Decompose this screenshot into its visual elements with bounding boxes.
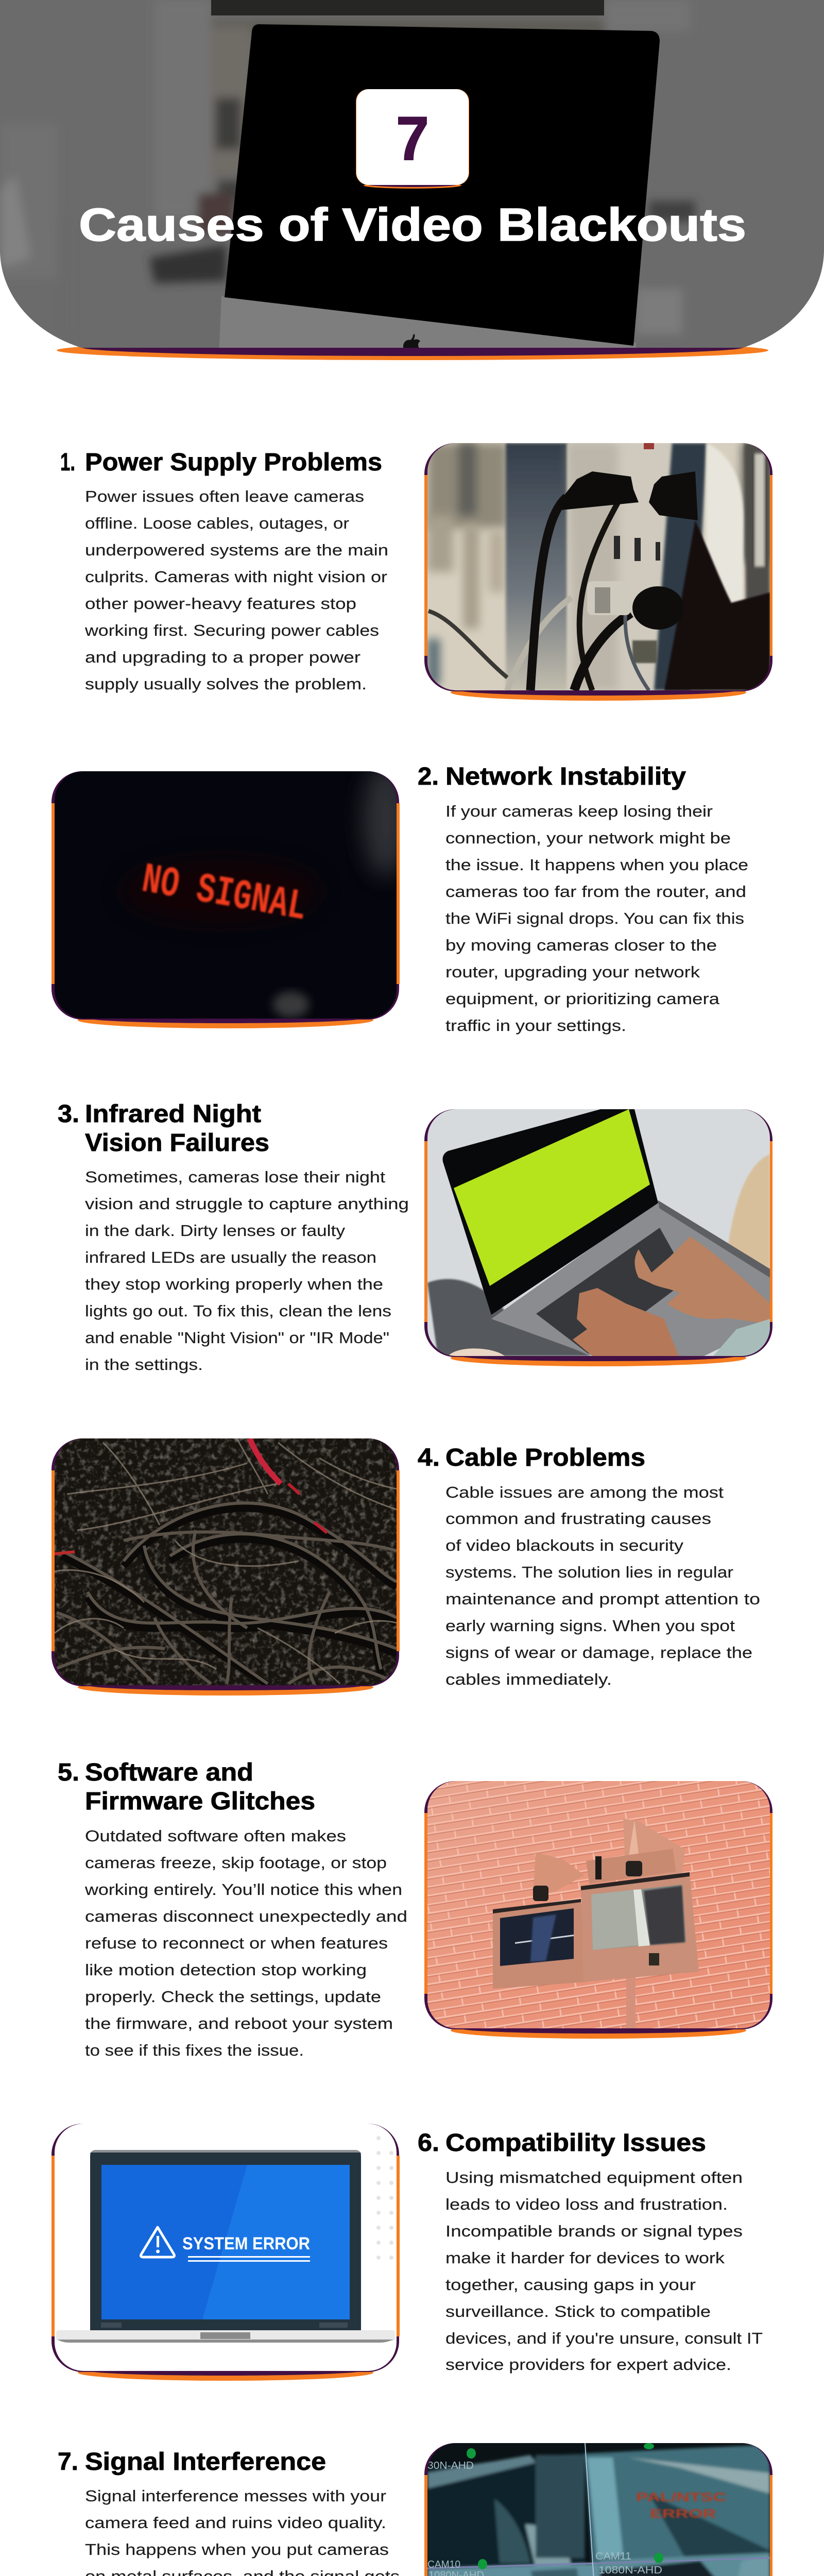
body text 3: infrared LEDs are usually the reason (85, 1248, 376, 1266)
body text 4: Cable issues are among the most (445, 1483, 724, 1501)
body text 4: common and frustrating causes (445, 1510, 711, 1528)
body text 1: underpowered systems are the main (85, 541, 388, 559)
body text 5: the firmware, and reboot your system (85, 2014, 393, 2032)
body text 5: refuse to reconnect or when features (85, 1934, 388, 1952)
body text 3: lights go out. To fix this, clean the lens (85, 1302, 391, 1320)
body text 2 (445, 802, 748, 1035)
body text 2: equipment, or prioritizing camera (445, 990, 720, 1008)
body text 5: cameras freeze, skip footage, or stop (85, 1854, 387, 1872)
body text 1: culprits. Cameras with night vision or (85, 568, 387, 586)
number badge: 7 (396, 104, 429, 173)
warning icon (141, 2227, 174, 2257)
heading 3: 3. (58, 1100, 79, 1128)
heading 2: Network Instability (445, 763, 686, 790)
image frame 7: cctv monitor (424, 2443, 772, 2576)
body text 6: together, causing gaps in your (445, 2276, 696, 2294)
body text 4: systems. The solution lies in regular (445, 1563, 733, 1581)
camera labels: CAM10 (427, 2559, 460, 2570)
body text 7: Signal interference messes with your (85, 2487, 386, 2505)
body text 5: to see if this fixes the issue. (85, 2041, 304, 2059)
heading 2: 2. (418, 763, 439, 790)
body text 1: Power issues often leave cameras (85, 487, 364, 505)
heading 3: Infrared Night (85, 1100, 261, 1128)
camera labels: 1080N-AHD (598, 2565, 662, 2576)
body text 4: early warning signs. When you spot (445, 1617, 735, 1635)
heading 3: Vision Failures (85, 1129, 269, 1157)
body text 6: surveillance. Stick to compatible (445, 2302, 711, 2320)
heading 5: 5. (58, 1759, 79, 1786)
header base shadow (57, 338, 768, 360)
image frame 4: tangled cables (52, 1438, 400, 1696)
camera labels (427, 2460, 662, 2576)
body text 1: offline. Loose cables, outages, or (85, 514, 349, 532)
body text 1: working first. Securing power cables (84, 621, 379, 639)
body text 2: router, upgrading your network (445, 963, 700, 981)
body text 4 (445, 1483, 760, 1688)
body text 6: leads to video loss and frustration. (445, 2195, 728, 2213)
no signal text: NO SIGNAL (139, 856, 310, 932)
body text 4: cables immediately. (445, 1670, 612, 1688)
section 5: software and firmware glitches (58, 1759, 772, 2059)
system error label: SYSTEM ERROR (182, 2234, 310, 2253)
body text 6: devices, and if you're unsure, consult IT (445, 2329, 763, 2347)
image frame 1: power strip photo (424, 443, 772, 701)
body text 6: Incompatible brands or signal types (445, 2222, 743, 2240)
body text 4: of video blackouts in security (445, 1536, 684, 1554)
body text 3 (85, 1168, 409, 1374)
number badge (356, 89, 469, 189)
body text 7 (85, 2487, 407, 2576)
body text 2: connection, your network might be (445, 829, 731, 847)
body text 5: working entirely. You’ll notice this when (84, 1880, 402, 1899)
heading 4: 4. (418, 1444, 440, 1471)
header banner (0, 0, 824, 360)
body text 3: and enable "Night Vision" or "IR Mode" (85, 1329, 389, 1347)
body text 4: signs of wear or damage, replace the (445, 1643, 752, 1662)
section 2: network instability (52, 762, 748, 1035)
body text 3: in the dark. Dirty lenses or faulty (85, 1222, 346, 1240)
pal/ntsc error text (636, 2490, 726, 2521)
body text 2: cameras too far from the router, and (445, 883, 746, 901)
section 1: power supply problems (60, 443, 772, 701)
body text 1: supply usually solves the problem. (85, 675, 367, 693)
heading 1: Power Supply Problems (85, 449, 382, 476)
apple logo (403, 334, 420, 348)
body text 1: and upgrading to a proper power (85, 648, 360, 666)
heading 4: Cable Problems (445, 1444, 645, 1471)
pal/ntsc error text: PAL/NTSC (636, 2490, 726, 2504)
body text 1: other power-heavy features stop (85, 595, 356, 613)
body text 6: Using mismatched equipment often (445, 2168, 743, 2187)
heading 6: 6. (418, 2129, 439, 2157)
body text 6: service providers for expert advice. (445, 2355, 731, 2374)
body text 7: This happens when you put cameras (85, 2540, 389, 2558)
heading 6: Compatibility Issues (445, 2129, 706, 2157)
body text 5: Outdated software often makes (85, 1827, 346, 1845)
heading 7: Signal Interference (85, 2448, 326, 2476)
body text 2: the issue. It happens when you place (445, 856, 748, 874)
image frame 2: no signal display (52, 762, 409, 1028)
heading 5 (58, 1759, 315, 1815)
body text 6: make it harder for devices to work (445, 2249, 725, 2267)
section 4: cable problems (52, 1438, 760, 1696)
image frame 3: laptop with green screen (424, 1109, 772, 1366)
body text 2: traffic in your settings. (445, 1016, 626, 1035)
camera labels: 30N-AHD (427, 2460, 474, 2471)
body text 5: properly. Check the settings, update (85, 1988, 381, 2006)
body text 2: If your cameras keep losing their (445, 802, 713, 820)
body text 3: in the settings. (85, 1355, 203, 1374)
body text 2: by moving cameras closer to the (445, 936, 717, 954)
image frame 5: monitors on brick wall (424, 1781, 772, 2039)
body text 3: they stop working properly when the (85, 1275, 383, 1293)
heading 5: Software and (85, 1759, 253, 1786)
header photo: desktop monitor (0, 0, 824, 355)
heading 1: 1. (60, 449, 75, 476)
body text 4: maintenance and prompt attention to (445, 1590, 760, 1608)
body text 6 (445, 2168, 763, 2374)
body text 7: camera feed and ruins video quality. (85, 2514, 386, 2532)
heading 3 (58, 1100, 269, 1157)
body text 5: like motion detection stop working (85, 1961, 367, 1979)
image frame 6: laptop with system error (52, 2124, 400, 2381)
camera labels: CAM11 (595, 2551, 631, 2562)
heading 5: Firmware Glitches (85, 1788, 315, 1815)
section 3: infrared night vision failures (58, 1100, 772, 1374)
body text 3: vision and struggle to capture anything (85, 1195, 409, 1213)
body text 2: the WiFi signal drops. You can fix this (445, 909, 744, 927)
body text 5 (84, 1827, 407, 2059)
system error label (182, 2237, 310, 2262)
section 6: compatibility issues (52, 2124, 763, 2381)
section 7: signal interference (58, 2443, 772, 2576)
body text 3: Sometimes, cameras lose their night (85, 1168, 385, 1186)
heading 7: 7. (58, 2448, 78, 2476)
body text 1 (84, 487, 388, 693)
title: Causes of Video Blackouts (79, 199, 746, 251)
pal/ntsc error text: ERROR (650, 2507, 716, 2521)
body text 5: cameras disconnect unexpectedly and (85, 1907, 407, 1925)
